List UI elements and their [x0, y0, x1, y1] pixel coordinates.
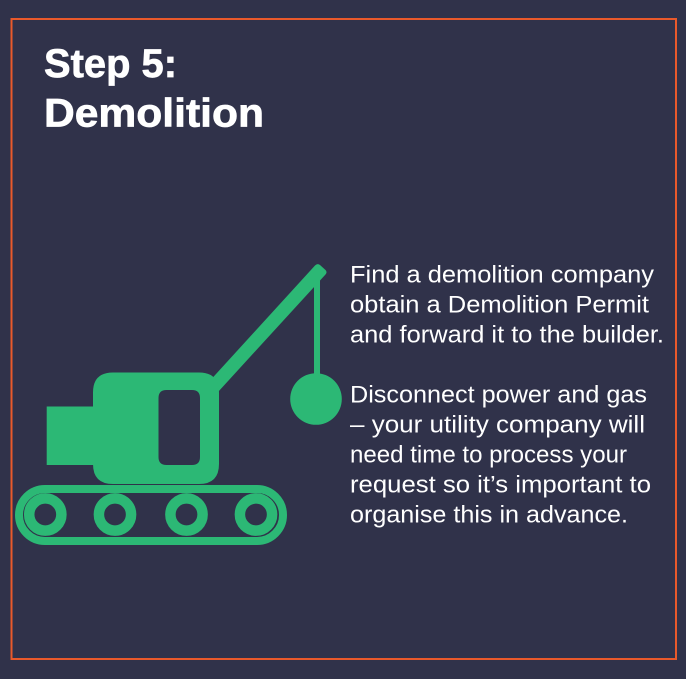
title: Demolition	[44, 92, 264, 136]
text block: disconnect utilities: request so it’s important to	[350, 472, 651, 498]
cab with window	[93, 372, 219, 484]
title: Step 5:	[44, 42, 177, 86]
wrecking cable	[314, 276, 320, 376]
counterweight	[47, 406, 97, 465]
track wheels	[29, 498, 272, 531]
text block: demolition company: and forward it to the builder.	[350, 322, 664, 348]
text block: disconnect utilities: need time to process your	[350, 442, 627, 468]
text block: demolition company: obtain a Demolition Permit	[350, 292, 649, 318]
text block: disconnect utilities: – your utility company will	[350, 412, 645, 438]
crane boom	[211, 264, 326, 392]
title	[44, 42, 264, 136]
text block: disconnect utilities: organise this in advance.	[350, 502, 628, 528]
text block: demolition company	[350, 262, 664, 348]
wrecking ball	[290, 373, 342, 425]
icon: demolition crane	[19, 264, 342, 541]
text block: disconnect utilities: Disconnect power and gas	[350, 382, 647, 408]
text block: disconnect utilities	[350, 382, 651, 528]
text block: demolition company: Find a demolition company	[350, 262, 654, 288]
caterpillar track	[19, 489, 283, 541]
